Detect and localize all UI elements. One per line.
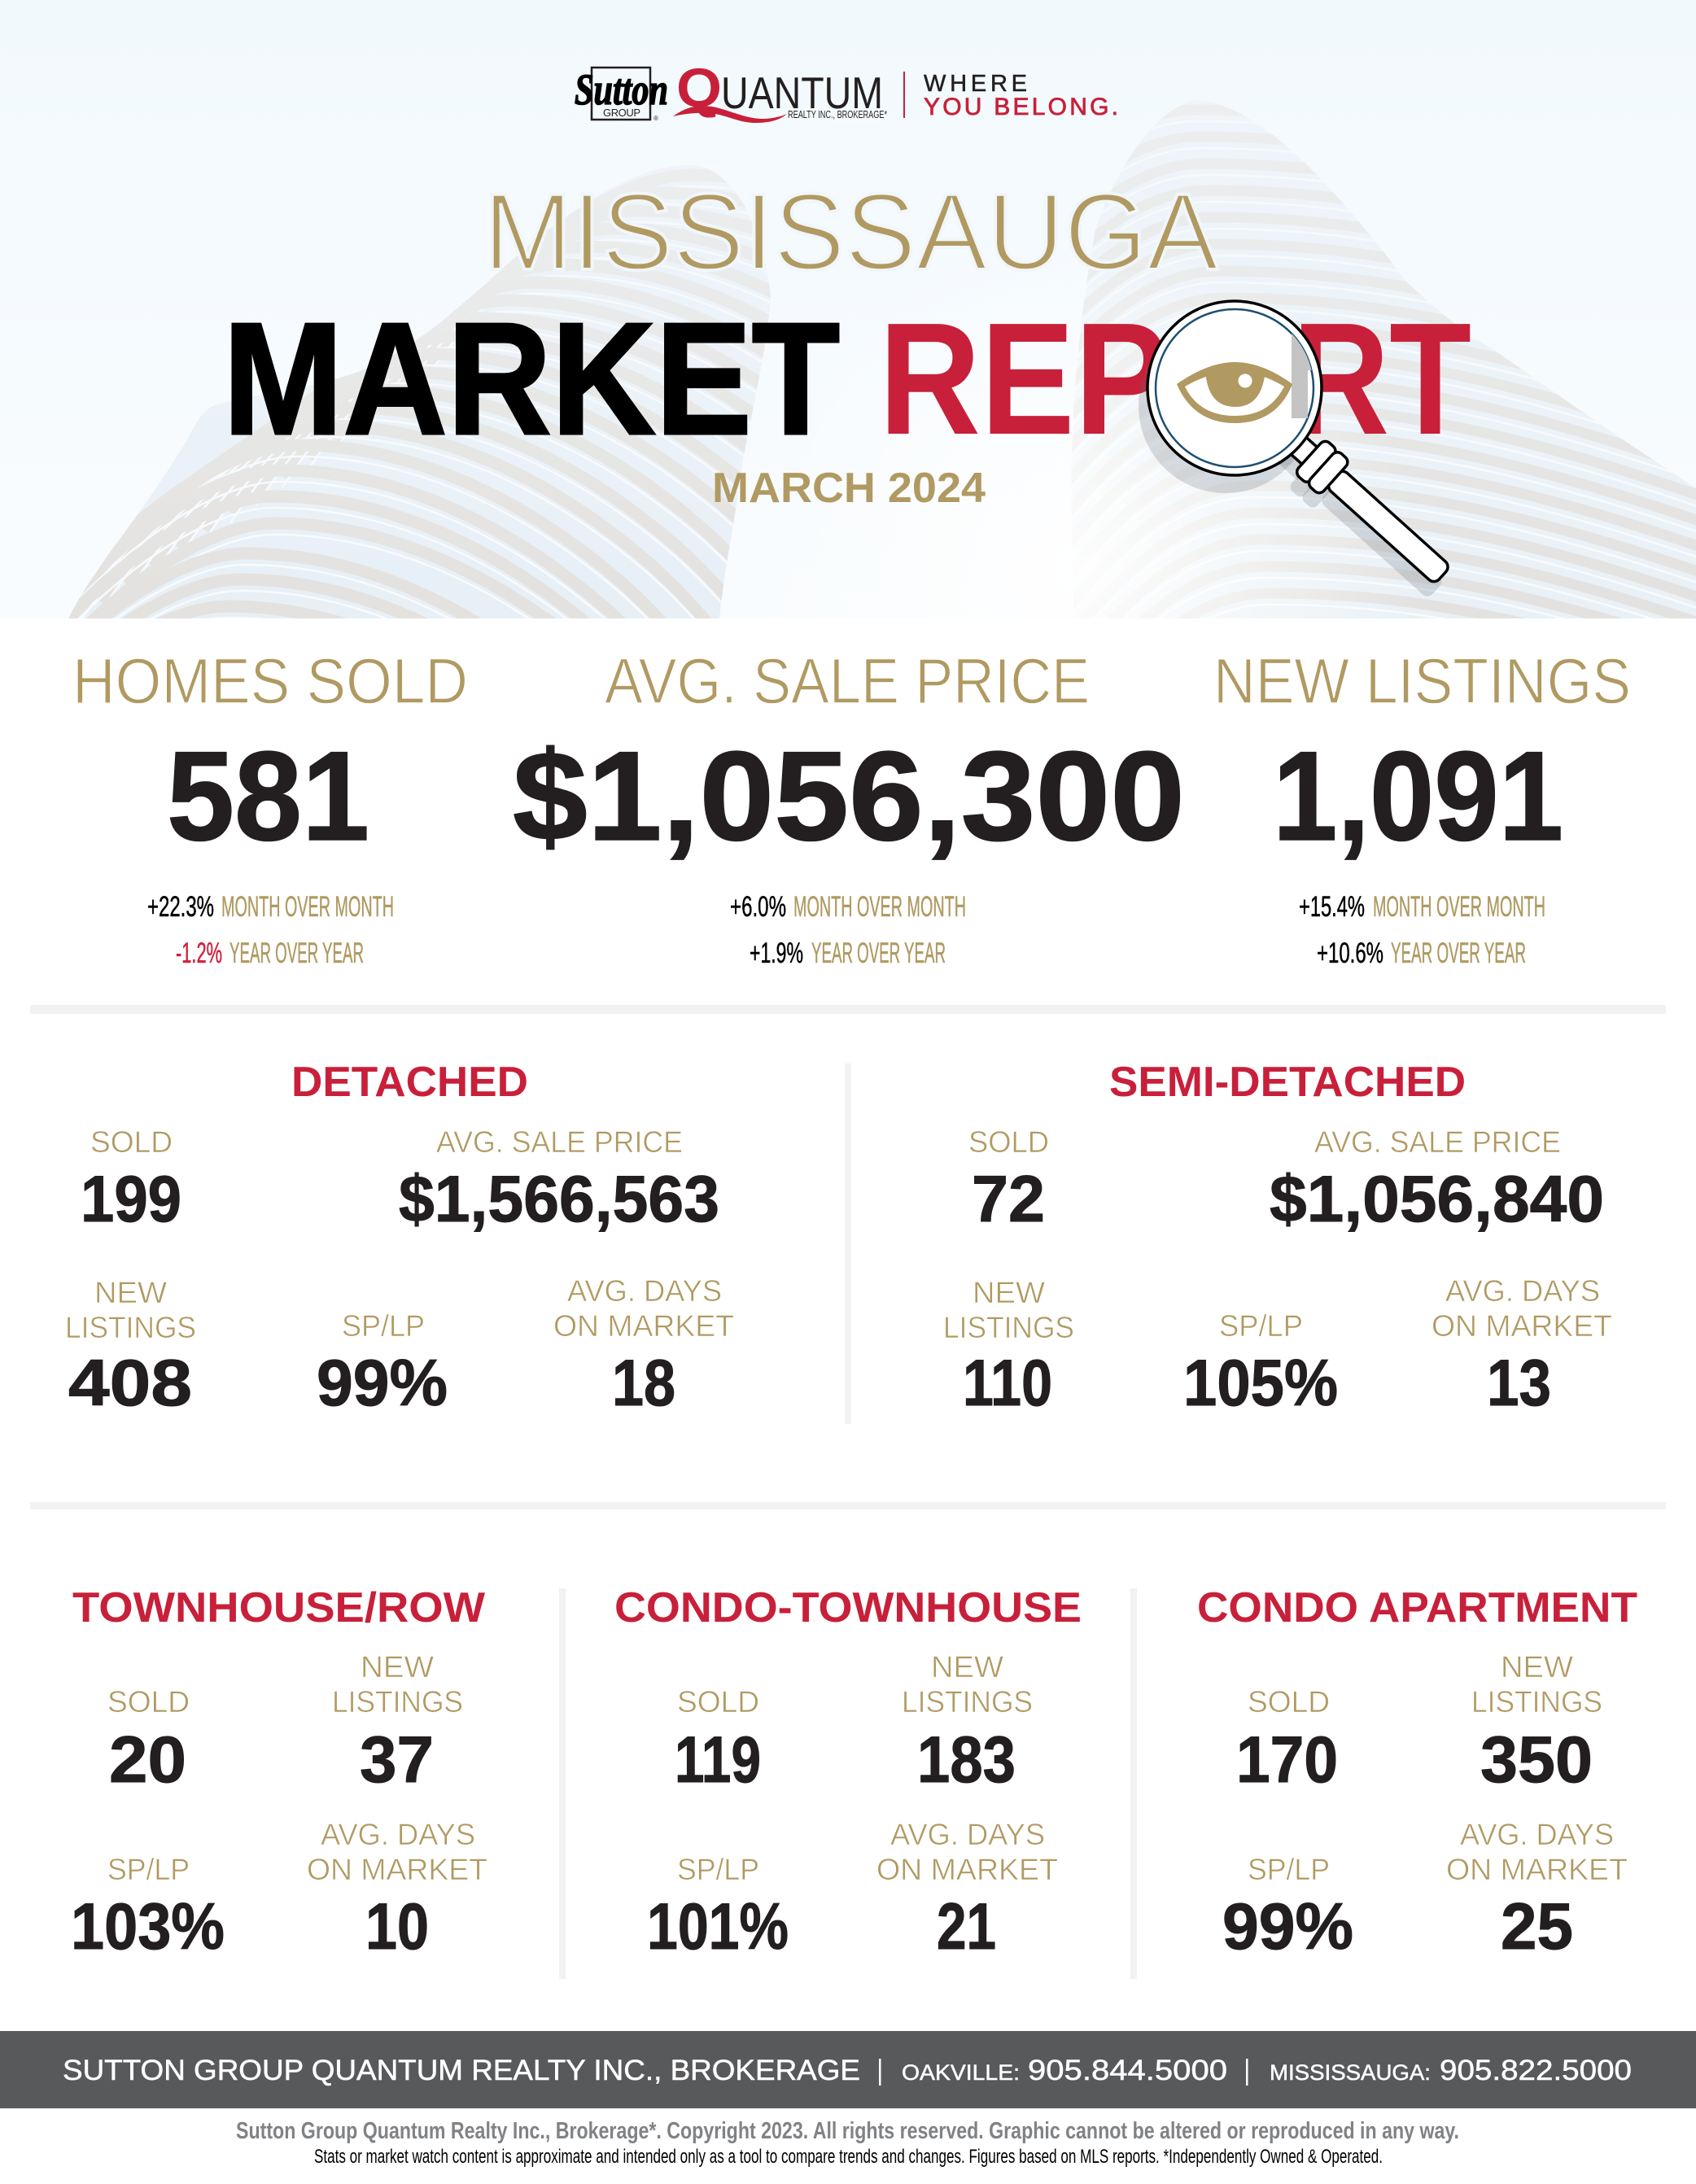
year over year change: YEAR OVER YEAR [229,937,364,969]
days on market label: AVG. DAYS [1460,1818,1614,1851]
avg sale price value: $1,056,840 [1270,1163,1604,1236]
panel: townhouse/row [71,1584,487,1963]
new listings label: NEW [361,1650,434,1684]
year over year change: +1.9% [750,937,803,969]
new listings label: LISTINGS [1471,1685,1602,1719]
oakville label: OAKVILLE: [902,2060,1020,2085]
sold label: SOLD [677,1685,759,1719]
sold value: 20 [109,1723,186,1797]
title: Market: MARKET [223,290,840,468]
month over month change [730,891,966,923]
month over month change [147,891,394,923]
sp/lp value: 99% [1222,1890,1353,1963]
footer contact bar [0,2031,1696,2108]
magnifier lens [1147,301,1322,475]
days on market label: ON MARKET [1432,1309,1612,1343]
mississauga label: MISSISSAUGA: [1270,2060,1431,2085]
days on market label [876,1818,1058,1886]
month over month change: +6.0% [730,891,786,923]
section heading: DETACHED [291,1059,528,1106]
magnifier handle [1277,423,1458,592]
brokerage name: SUTTON GROUP QUANTUM REALTY INC., BROKERAGE [63,2055,860,2086]
new listings value: 350 [1480,1723,1593,1797]
new listings value: 37 [360,1723,434,1797]
new listings value: 110 [963,1347,1052,1420]
panel: condo-townhouse [614,1584,1082,1963]
value: 581 [167,726,369,867]
new listings label: NEW [94,1276,167,1309]
logo divider [903,72,905,118]
new listings label: NEW [973,1276,1045,1309]
days on market label: ON MARKET [553,1309,734,1343]
sold label: SOLD [968,1125,1049,1159]
new listings label [65,1276,196,1344]
bar background [0,2031,1696,2108]
value: 1,091 [1273,726,1563,867]
panel: new listings [1213,644,1631,969]
sp/lp value: 103% [71,1890,225,1963]
days on market value: 10 [365,1890,429,1963]
mississauga phone: 905.822.5000 [1440,2055,1632,2086]
month over month change: MONTH OVER MONTH [793,891,966,923]
value: $1,056,300 [513,726,1185,867]
year over year change [1317,937,1526,969]
sold value: 170 [1236,1723,1338,1797]
tagline: where: WHERE [924,71,1027,97]
logo: Sutton script wordmark: Sutton [575,65,668,114]
days on market value: 18 [612,1347,675,1420]
new listings label: NEW [1501,1650,1573,1684]
days on market value: 25 [1501,1890,1573,1963]
logo: QUANTUM rest of wordmark: UANTUM [721,68,883,118]
panel: detached [65,1059,734,1420]
days on market label [1446,1818,1628,1886]
new listings label: LISTINGS [902,1685,1033,1719]
days on market label [553,1274,734,1343]
panel: homes sold [72,644,468,969]
section heading: SEMI-DETACHED [1109,1059,1466,1106]
days on market label: AVG. DAYS [1445,1274,1600,1308]
lens inner ring [1156,309,1314,467]
days on market label [1432,1274,1612,1343]
new listings label: LISTINGS [332,1685,463,1719]
month over month change: MONTH OVER MONTH [221,891,394,923]
new listings label: LISTINGS [943,1311,1074,1344]
avg sale price label: AVG. SALE PRICE [1314,1125,1561,1159]
heading: HOMES SOLD [72,644,468,717]
title: Mississauga: MISSISSAUGA [483,172,1219,293]
panel: condo apartment [1197,1584,1637,1963]
month over month change: MONTH OVER MONTH [1373,891,1545,923]
year over year change [750,937,946,969]
heading: NEW LISTINGS [1213,644,1631,717]
new listings value: 408 [68,1347,192,1420]
days on market value: 21 [937,1890,996,1963]
sp/lp value: 105% [1183,1347,1338,1420]
eye icon [1177,362,1292,423]
year over year change: -1.2% [176,937,222,969]
sold value: 199 [81,1163,181,1236]
new listings label: LISTINGS [65,1311,196,1344]
separator [1246,2059,1248,2086]
logo: Sutton Group Quantum [575,57,1118,123]
sp/lp value: 99% [317,1347,448,1420]
year over year change: YEAR OVER YEAR [811,937,946,969]
tagline: you belong: YOU BELONG. [924,94,1118,120]
days on market label: ON MARKET [307,1853,487,1886]
section heading: CONDO APARTMENT [1197,1584,1637,1631]
oakville phone: 905.844.5000 [1028,2055,1227,2086]
new listings value: 183 [917,1723,1016,1797]
sold value: 72 [972,1163,1045,1236]
sp/lp label: SP/LP [677,1853,759,1886]
title: Report, REP: REP [879,290,1169,468]
month over month change [1299,891,1545,923]
panel: semi-detached [943,1059,1612,1420]
sold label: SOLD [107,1685,190,1719]
title: Report, RT: RT [1292,290,1471,468]
days on market label: AVG. DAYS [567,1274,722,1308]
days on market label: ON MARKET [1446,1853,1628,1886]
sold label: SOLD [1248,1685,1330,1719]
magnified letter grey [1292,334,1312,418]
year over year change: YEAR OVER YEAR [1391,937,1526,969]
days on market label: AVG. DAYS [890,1818,1045,1851]
new listings label [943,1276,1074,1344]
hero background: twin towers [0,0,1696,618]
logo: realty line: REALTY INC., BROKERAGE* [788,108,887,120]
logo: Sutton Group box [592,68,650,120]
magnifier shadow [1139,319,1451,607]
days on market label: ON MARKET [876,1853,1058,1886]
days on market value: 13 [1487,1347,1551,1420]
new listings label [1471,1650,1602,1719]
month over month change: +15.4% [1299,891,1365,923]
days on market label [307,1818,487,1886]
panel: average sale price [513,644,1185,969]
sp/lp label: SP/LP [107,1853,190,1886]
sold label: SOLD [90,1125,173,1159]
new listings label [902,1650,1033,1719]
icon: magnifying glass with eye [1139,301,1458,607]
sp/lp label: SP/LP [342,1309,425,1343]
separator [879,2059,881,2086]
new listings label [332,1650,463,1719]
sp/lp label: SP/LP [1219,1309,1303,1343]
year over year change: +10.6% [1317,937,1383,969]
new listings label: NEW [931,1650,1003,1684]
section heading: TOWNHOUSE/ROW [72,1584,486,1631]
logo: red Q: Q [676,57,722,119]
logo: red swoosh [673,106,787,123]
avg sale price label: AVG. SALE PRICE [436,1125,683,1159]
sold value: 119 [675,1723,761,1797]
sp/lp value: 101% [647,1890,789,1963]
sp/lp label: SP/LP [1248,1853,1330,1886]
days on market label: AVG. DAYS [321,1818,475,1851]
section heading: CONDO-TOWNHOUSE [614,1584,1082,1631]
logo: registered mark: ® [653,115,658,122]
avg sale price value: $1,566,563 [399,1163,719,1236]
heading: AVG. SALE PRICE [605,644,1090,717]
year over year change [176,937,364,969]
subtitle: March 2024: MARCH 2024 [712,465,986,512]
logo: GROUP: GROUP [603,107,640,119]
month over month change: +22.3% [147,891,214,923]
